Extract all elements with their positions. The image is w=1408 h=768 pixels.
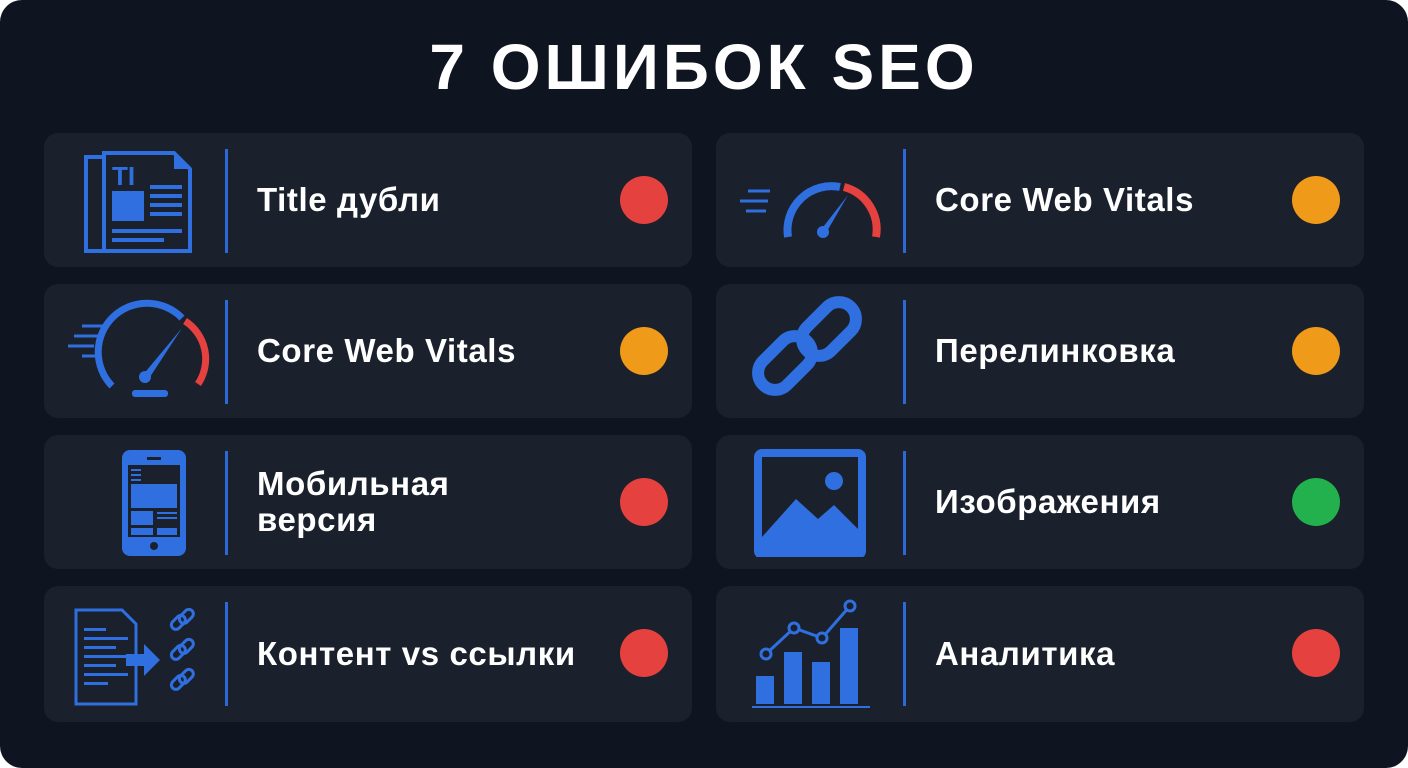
status dot: [1292, 629, 1340, 677]
label: Title дубли: [257, 181, 441, 218]
panel: Перелинковка: [716, 284, 1364, 418]
icon: gauge: [740, 182, 881, 238]
label: Аналитика: [935, 635, 1115, 672]
status dot: [1292, 327, 1340, 375]
panel: Изображения: [716, 435, 1364, 569]
icon: gauge: [68, 300, 210, 397]
status dot: [1292, 478, 1340, 526]
label: [257, 465, 450, 538]
label: Перелинковка: [935, 332, 1175, 369]
panel: Title дубли: [44, 133, 692, 267]
icon: document: TI: [112, 161, 135, 191]
status dot: [620, 478, 668, 526]
panel: Мобильная версия: [44, 435, 692, 569]
label: Core Web Vitals: [935, 181, 1194, 218]
label: Core Web Vitals: [257, 332, 516, 369]
panel: Аналитика: [716, 586, 1364, 722]
title: 7 ОШИБОК SEO: [429, 31, 979, 103]
status dot: [620, 176, 668, 224]
status dot: [1292, 176, 1340, 224]
icon: image: [754, 449, 866, 557]
icon: chart: [752, 600, 870, 708]
panel: Core Web Vitals right: [716, 133, 1364, 267]
icon: phone: [122, 450, 186, 556]
icon: document: [84, 151, 192, 253]
panel: Core Web Vitals left: [44, 284, 692, 418]
icon: chain link: [752, 296, 862, 396]
status dot: [620, 327, 668, 375]
icon: content to links: [74, 608, 195, 706]
label: Мобильная: [257, 465, 450, 502]
status dot: [620, 629, 668, 677]
label: версия: [257, 501, 377, 538]
panel: Контент vs ссылки: [44, 586, 692, 722]
label: Контент vs ссылки: [257, 635, 576, 672]
label: Изображения: [935, 483, 1161, 520]
